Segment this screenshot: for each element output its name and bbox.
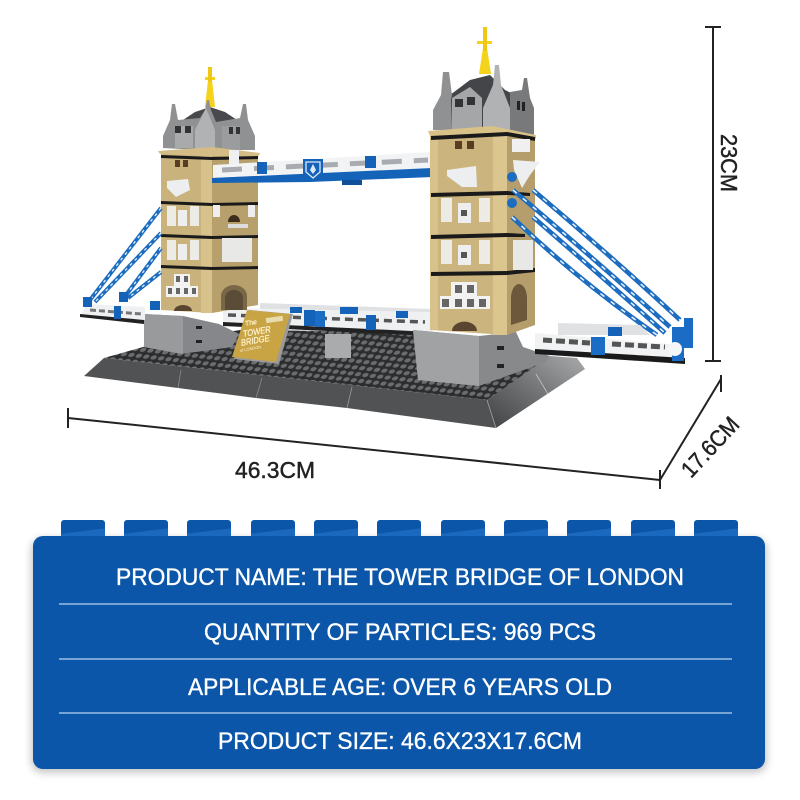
panel: product info bbox=[31, 520, 767, 773]
tower cornice bbox=[158, 147, 260, 157]
tower front face bbox=[161, 153, 212, 313]
dimension: width 46.3CM: 46.3CM bbox=[235, 457, 315, 483]
dimension: height 23CM: 23CM bbox=[716, 134, 742, 192]
model: left deck bbox=[80, 292, 160, 324]
tower finial crossbar bbox=[205, 77, 215, 80]
tower finial spire bbox=[479, 48, 491, 74]
model: left chains bbox=[90, 208, 161, 302]
tower finial tip bbox=[483, 27, 487, 51]
front windows bbox=[440, 141, 490, 331]
tower roof bbox=[433, 65, 534, 135]
brick studs bbox=[61, 520, 738, 538]
plaque: The Tower Bridge bbox=[232, 310, 293, 364]
tower front face bbox=[430, 130, 507, 335]
model: overhead walkway bbox=[212, 152, 432, 185]
plaque: The Tower Bridge: The bbox=[245, 319, 257, 328]
age: APPLICABLE AGE: OVER 6 YEARS OLD bbox=[188, 674, 612, 701]
model: road deck between towers bbox=[223, 303, 432, 358]
tower corner column bbox=[493, 130, 507, 335]
particles: QUANTITY OF PARTICLES: 969 PCS bbox=[204, 619, 596, 646]
front windows bbox=[166, 160, 199, 311]
product name: PRODUCT NAME: THE TOWER BRIDGE OF LONDON bbox=[116, 564, 684, 591]
tower finial bbox=[205, 80, 215, 107]
panel shadow bbox=[31, 538, 767, 773]
dimension: width 46.3CM bbox=[68, 408, 660, 489]
dividers bbox=[59, 604, 732, 713]
model: right deck bbox=[535, 318, 693, 364]
tower side face bbox=[212, 154, 258, 313]
tower finial cross bbox=[477, 41, 492, 44]
tower roof bbox=[163, 100, 255, 150]
plaque: The Tower Bridge: BRIDGE bbox=[241, 333, 270, 348]
side windows and arch bbox=[213, 150, 255, 310]
plaque: The Tower Bridge: of LONDON bbox=[240, 344, 261, 353]
black bands bbox=[161, 155, 258, 270]
model: right tower bbox=[428, 27, 540, 335]
shield emblem bbox=[303, 159, 323, 181]
model: right chains bbox=[507, 172, 680, 335]
model: base plate bbox=[84, 330, 585, 428]
plaque: The Tower Bridge: TOWER bbox=[243, 324, 271, 339]
dimension: depth 17.6CM: 17.6CM bbox=[676, 411, 744, 482]
tower cornice bbox=[428, 126, 536, 139]
tower corner column bbox=[201, 155, 212, 313]
tower side face bbox=[507, 133, 535, 335]
model: left pier bbox=[144, 314, 239, 354]
model: right pier bbox=[413, 330, 550, 386]
panel body bbox=[33, 536, 765, 769]
size: PRODUCT SIZE: 46.6X23X17.6CM bbox=[218, 728, 582, 755]
model: left tower bbox=[158, 67, 260, 313]
dimension: depth 17.6CM bbox=[660, 375, 744, 482]
tower finial tip bbox=[208, 67, 212, 82]
side windows and arch bbox=[511, 139, 540, 325]
black bands bbox=[431, 132, 535, 276]
